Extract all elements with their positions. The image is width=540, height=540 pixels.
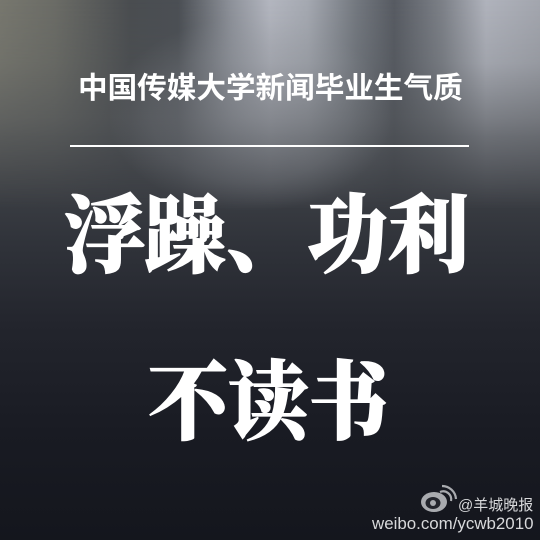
divider rule — [70, 145, 469, 147]
watermark: weibo — [372, 484, 533, 533]
background: dark metallic gradient with spotlights — [0, 0, 540, 410]
headline: 不读书: 不读书 — [148, 357, 388, 451]
watermark url: weibo.com/ycwb2010 — [372, 514, 533, 533]
title: 中国传媒大学新闻毕业生气质 — [78, 72, 463, 105]
watermark account name: @羊城晚报 — [458, 497, 533, 514]
headline: 浮躁、功利: 浮躁、功利 — [64, 190, 469, 284]
icon: weibo eye logo — [421, 484, 458, 512]
